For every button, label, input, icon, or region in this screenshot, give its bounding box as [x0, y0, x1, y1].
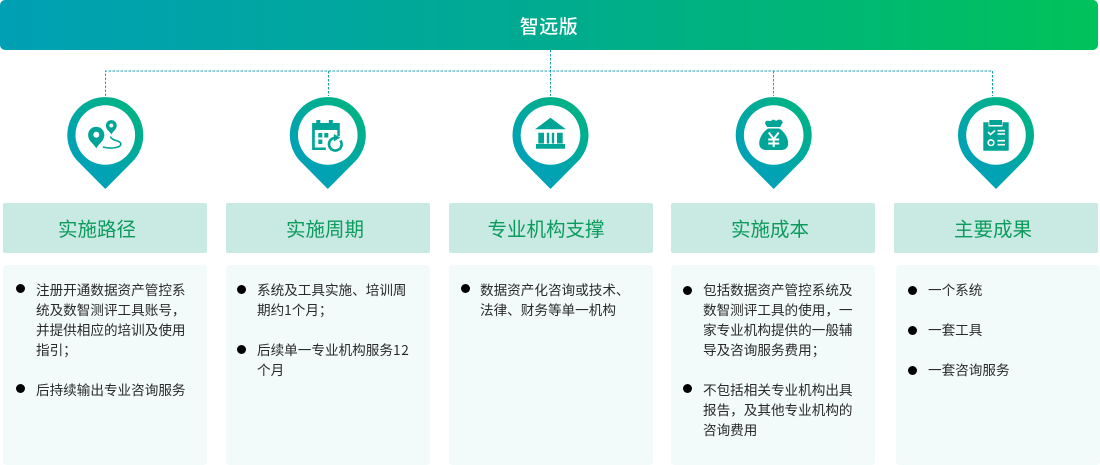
- panel: 专业机构支撑: [449, 265, 653, 465]
- panel: 实施成本: 咨询费用: [703, 419, 757, 439]
- panel: 实施路径: 指引；: [36, 339, 77, 359]
- heading: 实施周期: [226, 203, 430, 253]
- panel: 主要成果: 一个系统: [928, 279, 982, 299]
- connector lines and location-pin icons: [67, 50, 1034, 189]
- panel: 专业机构支撑: 法律、财务等单一机构: [480, 299, 616, 319]
- panel: 实施路径: 统及数智测评工具账号，: [36, 299, 186, 319]
- panel: 实施成本: 包括数据资产管控系统及: [703, 279, 853, 299]
- heading: 实施周期: 实施周期: [286, 213, 364, 242]
- icon: money bag pin: [736, 97, 812, 189]
- panel: 主要成果: 一套咨询服务: [928, 359, 1010, 379]
- icon: checklist pin: [958, 97, 1034, 189]
- panel: 专业机构支撑: 数据资产化咨询或技术、: [480, 279, 630, 299]
- panel: 实施成本: 家专业机构提供的一般辅: [703, 319, 853, 339]
- panel: 实施周期: [226, 265, 430, 465]
- panel: 实施成本: 数智测评工具的使用，一: [703, 299, 853, 319]
- panel: 主要成果: 一套工具: [928, 319, 982, 339]
- panel: 实施成本: 导及咨询服务费用；: [703, 339, 825, 359]
- title bar: 智远版: 智远版: [520, 12, 578, 39]
- panel: 实施成本: 报告，及其他专业机构的: [703, 399, 853, 419]
- panel: 主要成果: [896, 265, 1100, 465]
- heading: 主要成果: [894, 203, 1098, 253]
- icon: route pin: [67, 97, 143, 189]
- heading: 主要成果: 主要成果: [954, 213, 1032, 242]
- icon: institution pin: [512, 97, 588, 189]
- heading: 实施路径: [3, 203, 207, 253]
- heading: 实施成本: 实施成本: [731, 213, 809, 242]
- icon: calendar pin: [290, 97, 366, 189]
- panel: 实施周期: 系统及工具实施、培训周: [257, 279, 407, 299]
- heading: 实施成本: [671, 203, 875, 253]
- panel: 实施路径: 并提供相应的培训及使用: [36, 319, 186, 339]
- panel: 实施成本: [671, 265, 875, 465]
- heading: 专业机构支撑: [449, 203, 653, 253]
- panel: 实施周期: 个月: [257, 359, 284, 379]
- heading: 实施路径: 实施路径: [58, 213, 136, 242]
- heading: 专业机构支撑: 专业机构支撑: [487, 213, 604, 242]
- panel: 实施周期: 后续单一专业机构服务12: [257, 339, 410, 359]
- panel: 实施路径: [3, 265, 207, 465]
- panel: 实施周期: 期约1个月；: [257, 299, 333, 319]
- panel: 实施路径: 后持续输出专业咨询服务: [36, 379, 186, 399]
- panel: 实施成本: 不包括相关专业机构出具: [703, 379, 853, 399]
- panel: 实施路径: 注册开通数据资产管控系: [36, 279, 186, 299]
- title bar: 智远版: [0, 0, 1098, 50]
- connector: dashed lines: [106, 50, 992, 96]
